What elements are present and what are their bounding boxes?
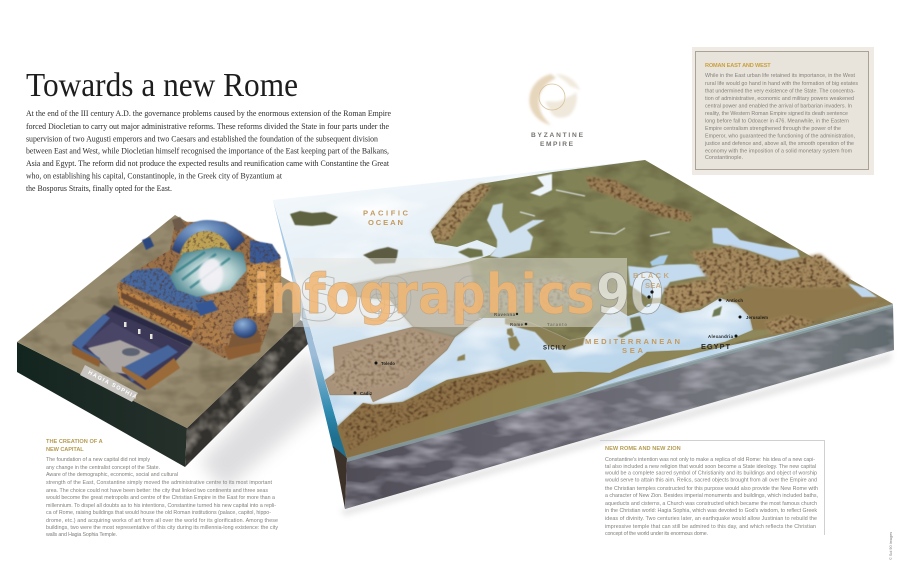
title: Towards a new Rome — [26, 67, 298, 104]
panel body text: would serve to attain this aim. Relics, sacred objects brought from all over the Empire and — [605, 478, 817, 484]
sea: White Sea — [530, 174, 552, 196]
body text: any change in the centralist concept of the State. — [46, 465, 160, 471]
map block translucent side wedge — [273, 200, 347, 458]
mountain: Atlas range — [340, 363, 545, 450]
intro text block: At the end of the III century A.D. the governance problems caused by the enormous extension of the Roman Empire — [26, 109, 391, 118]
panel: Roman East and West — [692, 47, 874, 175]
watermark digits: 90: 90 — [596, 262, 664, 326]
label: Sicily: SICILY — [543, 346, 566, 352]
label: Black Sea: SEA — [645, 281, 662, 290]
panel body text: reality, the Western Roman Empire signed its death sentence — [705, 111, 848, 117]
panel body text — [605, 457, 818, 537]
panel body text: tal also included a new religion that would soon become a State ideology. The new capital — [605, 464, 816, 470]
city marker: Taranto: Taranto — [547, 322, 567, 327]
watermark outline text — [298, 265, 493, 335]
sea: Black Sea — [628, 264, 717, 298]
east tower — [247, 262, 281, 316]
mountain: Caucasus and Armenia — [690, 246, 850, 296]
city marker: Toledo: Toledo — [381, 361, 395, 366]
panel body text: Constantinople. — [705, 155, 743, 161]
block right face — [185, 320, 322, 467]
block ground surface — [17, 215, 305, 428]
building: Hagia Sophia — [72, 217, 281, 390]
city marker: Alexandria: Alexandria — [708, 334, 734, 339]
south colonnade — [117, 287, 200, 338]
panel heading: ROMAN EAST AND WEST — [705, 63, 771, 69]
label: Mediterranean Sea: SEA — [622, 346, 644, 355]
atrium courtyard — [72, 310, 190, 390]
city marker: Toledo — [374, 361, 395, 366]
map labels — [354, 208, 768, 396]
label: Pacific Ocean — [363, 208, 409, 227]
mountain: Anatolia — [664, 280, 722, 312]
watermark outline text: So — [298, 265, 398, 335]
intro text block: forced Diocletian to carry out major administrative reforms. These reforms divided the State in four parts under the — [26, 122, 389, 131]
panel body text: aqueducts and cisterns, a Church was constructed which became the most famous church — [605, 501, 817, 507]
logo label: Byzantine Empire — [531, 132, 584, 148]
east roof — [250, 240, 281, 266]
body text — [46, 457, 278, 538]
map block front rock face — [345, 306, 894, 509]
body text: strength of the East, Constantine simply moved the administrative centre to its most important — [46, 480, 273, 486]
city marker: Rome: Rome — [510, 322, 524, 327]
watermark outline text: 90 — [373, 265, 493, 335]
body text: ca of Rome, raising buildings that would house the old Roman institutions (palace, capitol, hippo- — [46, 510, 271, 516]
intro text block: the Bosporus Straits, finally opted for the East. — [26, 184, 172, 193]
intro text block: supervision of two Augusti emperors and two Caesars and established the foundation of the subsequent division — [26, 134, 379, 144]
panel body text: While in the East urban life retained its importance, in the West — [705, 73, 856, 79]
panel body text: rural life would go hand in hand with the formation of big estates — [705, 81, 858, 87]
sea: Baltic — [487, 203, 545, 258]
panel body text: Empire centralism strengthened through the power of the — [705, 126, 841, 132]
mountain: Zagros — [765, 315, 815, 334]
windows — [124, 322, 152, 339]
intro text block — [26, 109, 391, 193]
rear annexes — [172, 217, 186, 232]
body text: area. The choice could not have been better: the city that linked two continents and three seas — [46, 488, 268, 494]
intro text block: between East and West, while Diocletian himself recognised the importance of the East keeping part of the Balkans, — [26, 146, 389, 156]
body text: walls and Hagia Sophia Temple. — [46, 532, 117, 538]
land: Europe, Asia and North Africa — [290, 160, 893, 458]
west roofs — [120, 268, 205, 314]
panel body text: economy with the imposition of a solid monetary system from — [705, 148, 853, 154]
small dome annex — [224, 338, 262, 360]
watermark panel — [293, 258, 627, 327]
label: Pacific Ocean: OCEAN — [368, 218, 403, 227]
main dome shell — [172, 220, 245, 254]
label tag: Hagia Sophia: HAGIA SOPHIA — [87, 370, 137, 401]
map block corner — [333, 446, 347, 509]
icon: Byzantine Empire globe logo — [529, 74, 580, 125]
city marker: Ravenna: Ravenna — [494, 312, 516, 317]
panel: New Rome and New Zion — [600, 440, 824, 537]
land tint: France — [345, 264, 480, 337]
sea: Persian Gulf — [847, 283, 877, 297]
label: Mediterranean Sea — [585, 337, 680, 355]
land: islands — [457, 306, 722, 361]
mountain: Scandinavian range — [431, 184, 492, 242]
illustration: relief map block — [273, 160, 894, 509]
central brick mass — [208, 290, 250, 348]
sea surface — [273, 160, 893, 458]
panel body text: the Christian temples constructed for this purpose would also provide the New Rome with — [605, 486, 818, 492]
panel body text: tion of administrative, economic and military powers weakened — [705, 96, 854, 102]
land tint: Middle East — [720, 282, 880, 330]
body text: millennium. To dispel all doubts as to his intentions, Constantine turned his new capital into a repli- — [46, 503, 276, 509]
sea: Caspian — [712, 228, 800, 261]
label: Egypt: EGYPT — [701, 342, 730, 351]
body text: buildings, two were the most representative of this city during its millennia-long existence: the city — [46, 525, 278, 531]
land tint: North Africa — [337, 328, 790, 458]
panel body text: impressive temple that can still be admired to this day, and which reflects the Christian — [605, 524, 816, 530]
panel body text — [704, 73, 858, 161]
body text: Aware of the demographic, economic, social and cultural — [46, 472, 178, 478]
atrium front wall — [122, 345, 178, 382]
logo label: Byzantine Empire: EMPIRE — [540, 141, 574, 148]
label: Pacific Ocean: PACIFIC — [363, 208, 409, 218]
land tint: Iberia — [325, 327, 455, 402]
city marker: Antioch: Antioch — [726, 298, 743, 303]
rivers — [520, 190, 670, 236]
city marker: Cadiz: Cadiz — [360, 391, 372, 396]
illustration: Hagia Sophia block — [17, 215, 322, 467]
panel body text: a character of New Zion. Besides imperial monuments and buildings, which included baths, — [605, 493, 818, 499]
panel body text: concept of the world under its enormous dome. — [605, 531, 708, 537]
land: British Isles — [363, 247, 398, 264]
mountain: Ural range — [585, 176, 692, 222]
city marker: Antioch — [718, 298, 743, 303]
panel body text: in the Christian world: Hagia Sophia, which was devoted to God's wisdom, to reflect Greek — [605, 508, 817, 514]
panel body text: Emperor, who guaranteed the functioning of the administration, — [705, 134, 855, 140]
panel body text: would be a complete sacred symbol of Christianity and its buildings and object of worship — [605, 470, 817, 476]
heading — [46, 439, 103, 453]
atrium west wall — [72, 314, 110, 366]
south buttress — [196, 310, 224, 346]
panel body text: that undermined the very existence of the State. The concentra- — [705, 88, 855, 94]
heading: THE CREATION OF A — [46, 439, 103, 445]
heading: NEW CAPITAL — [46, 447, 84, 453]
label: Black Sea: BLACK — [633, 271, 670, 280]
city marker: Cadiz — [354, 391, 372, 396]
building mass — [117, 222, 281, 358]
city marker: Jerusalem: Jerusalem — [746, 315, 768, 320]
panel body text: Constantine's intention was not only to make a replica of old Rome: his idea of a new capi- — [605, 457, 815, 463]
panel body text: long before fall to Odoacer in 476. Meanwhile, in the Eastern — [705, 118, 849, 124]
city marker: Constantinople — [647, 290, 654, 299]
body text: The foundation of a new capital did not imply — [46, 457, 150, 463]
glass cutaway nave — [170, 247, 247, 297]
panel body text: ideas of divinity. Two centuries later, an earthquake would allow Justinian to rebuild the — [605, 516, 817, 522]
text block: The creation of a new capital — [46, 439, 278, 538]
mountain: Iberia ranges — [330, 330, 450, 392]
intro text block: who, on establishing his capital, Constantinople, in the Greek city of Byzantium at — [26, 172, 283, 180]
panel body text: justice and defence and, above all, the smooth operation of the — [704, 141, 854, 147]
intro text block: Asia and Egypt. The reform did not produce the expected results and reunification came with Constantine the Great — [26, 159, 390, 168]
logo label: Byzantine Empire: BYZANTINE — [531, 132, 584, 139]
credit line: © Sol 90 Images — [889, 532, 893, 560]
panel body text: central power and enabled the arrival of barbarian invaders. In — [705, 104, 852, 110]
watermark text: infographics: infographics — [253, 262, 595, 326]
map rim highlight — [347, 304, 893, 462]
block left face — [17, 342, 187, 467]
label: Black Sea — [633, 271, 670, 290]
mountain: Alps and Pyrenees — [430, 275, 600, 318]
land: Denmark — [458, 248, 483, 258]
land: Iceland — [290, 211, 338, 226]
drop shadow beneath blocks — [200, 350, 893, 516]
land: Italy — [505, 318, 585, 350]
label: Mediterranean Sea: MEDITERRANEAN — [585, 337, 680, 346]
panel heading: NEW ROME AND NEW ZION — [605, 446, 681, 452]
body text: would become the great metropolis and centre of the Christian Empire in the East for more than a — [46, 495, 275, 501]
body text: drome, etc.) and acquiring works of art from all over the world for its glorification. Among these — [46, 518, 278, 524]
